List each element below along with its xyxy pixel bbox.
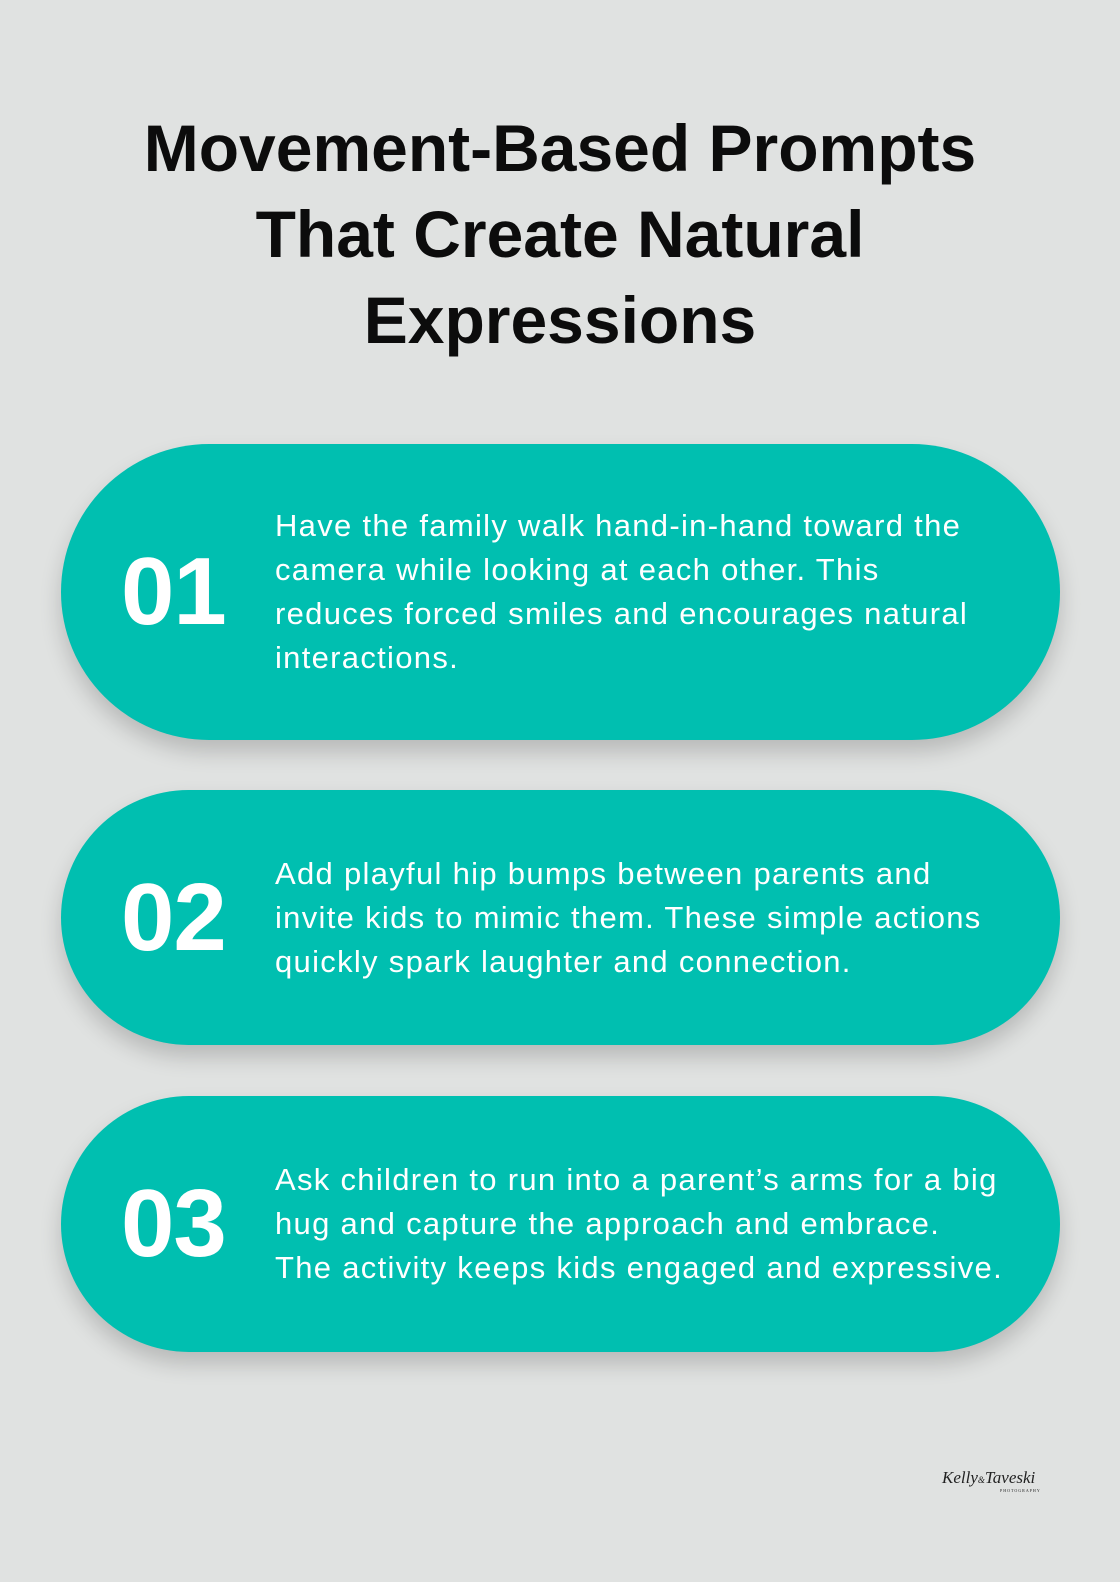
text 03: hug and capture the approach and embrace.: [275, 1206, 940, 1241]
title: Movement-Based Prompts: [144, 111, 976, 185]
panel: step 03: [61, 1096, 1060, 1352]
panel: step 02: [61, 790, 1060, 1045]
text 02: quickly spark laughter and connection.: [275, 944, 852, 978]
text 01: Have the family walk hand-in-hand toward the: [275, 508, 961, 543]
number 03: 03: [121, 1170, 226, 1277]
panel: step 01: [61, 444, 1060, 740]
text 01: interactions.: [275, 640, 459, 675]
text 01: camera while looking at each other. This: [275, 552, 880, 587]
logo signature: PHOTOGRAPHY: [1000, 1488, 1041, 1493]
text 01: reduces forced smiles and encourages natural: [275, 596, 968, 631]
logo signature: Kelly&Taveski: [942, 1468, 1035, 1487]
text 02: invite kids to mimic them. These simple actions: [275, 900, 982, 934]
text 02: [275, 856, 982, 978]
text 02: Add playful hip bumps between parents and: [275, 856, 931, 890]
text 03: Ask children to run into a parent’s arms for a big: [275, 1162, 998, 1197]
title: [144, 111, 976, 357]
title: Expressions: [364, 283, 756, 357]
number 02: 02: [121, 864, 226, 970]
text 03: The activity keeps kids engaged and expressive.: [275, 1250, 1003, 1285]
number 01: 01: [121, 538, 226, 645]
text 03: [275, 1162, 1003, 1285]
title: That Create Natural: [256, 197, 864, 271]
text 01: [275, 508, 968, 675]
